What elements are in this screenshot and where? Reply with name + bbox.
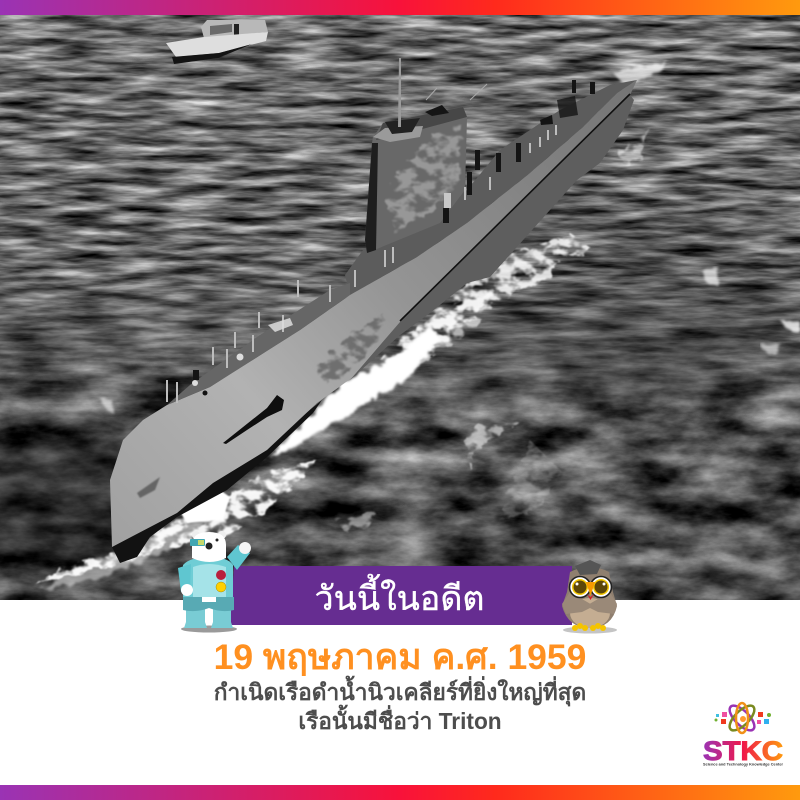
description line 2: เรือนั้นมีชื่อว่า Triton [298,704,502,734]
logo caption: Science and Technology Knowledge Center [703,762,784,766]
conning tower [365,107,467,253]
torpedo opening [223,395,284,444]
ship wake foam [30,60,800,590]
top gradient bar [0,0,800,15]
mascot: owl with graduation cap [562,560,617,634]
atom icon [726,702,758,734]
deck details [268,318,293,332]
submarine hull [110,58,637,563]
glasses and eyes [570,576,590,598]
ribbon title text: วันนี้ในอดีต [314,574,484,618]
legs [184,608,207,628]
crew on deck [193,80,595,380]
body [183,557,233,598]
date heading: 19 พฤษภาคม ค.ศ. 1959 [214,637,586,677]
logo dots [714,712,771,724]
hull weathering patches [317,315,385,385]
owl body [562,567,617,628]
hull waterline shadow [112,400,322,563]
logo: STKC [703,702,784,766]
deck rear [345,80,637,295]
deck fore [167,283,350,405]
purple title ribbon [230,566,572,625]
feet [572,623,606,631]
raised arm [227,545,250,570]
description line 1: กำเนิดเรือดำน้ำนิวเคลียร์ที่ยิ่งใหญ่ที่สุด [214,675,586,707]
bottom gradient bar [0,785,800,800]
patrol boat [166,20,268,64]
head [192,531,200,539]
mascot: polar bear robot [178,531,251,632]
sea surface [0,15,800,600]
hull side [110,80,637,547]
mast [398,58,401,127]
tower camouflage patches [385,122,462,235]
deck railing stanchions [167,125,556,403]
logo wordmark: STKC [703,736,783,766]
lower hull band [350,95,634,380]
cap [575,560,601,575]
photo: submarine Triton at sea [0,15,800,600]
